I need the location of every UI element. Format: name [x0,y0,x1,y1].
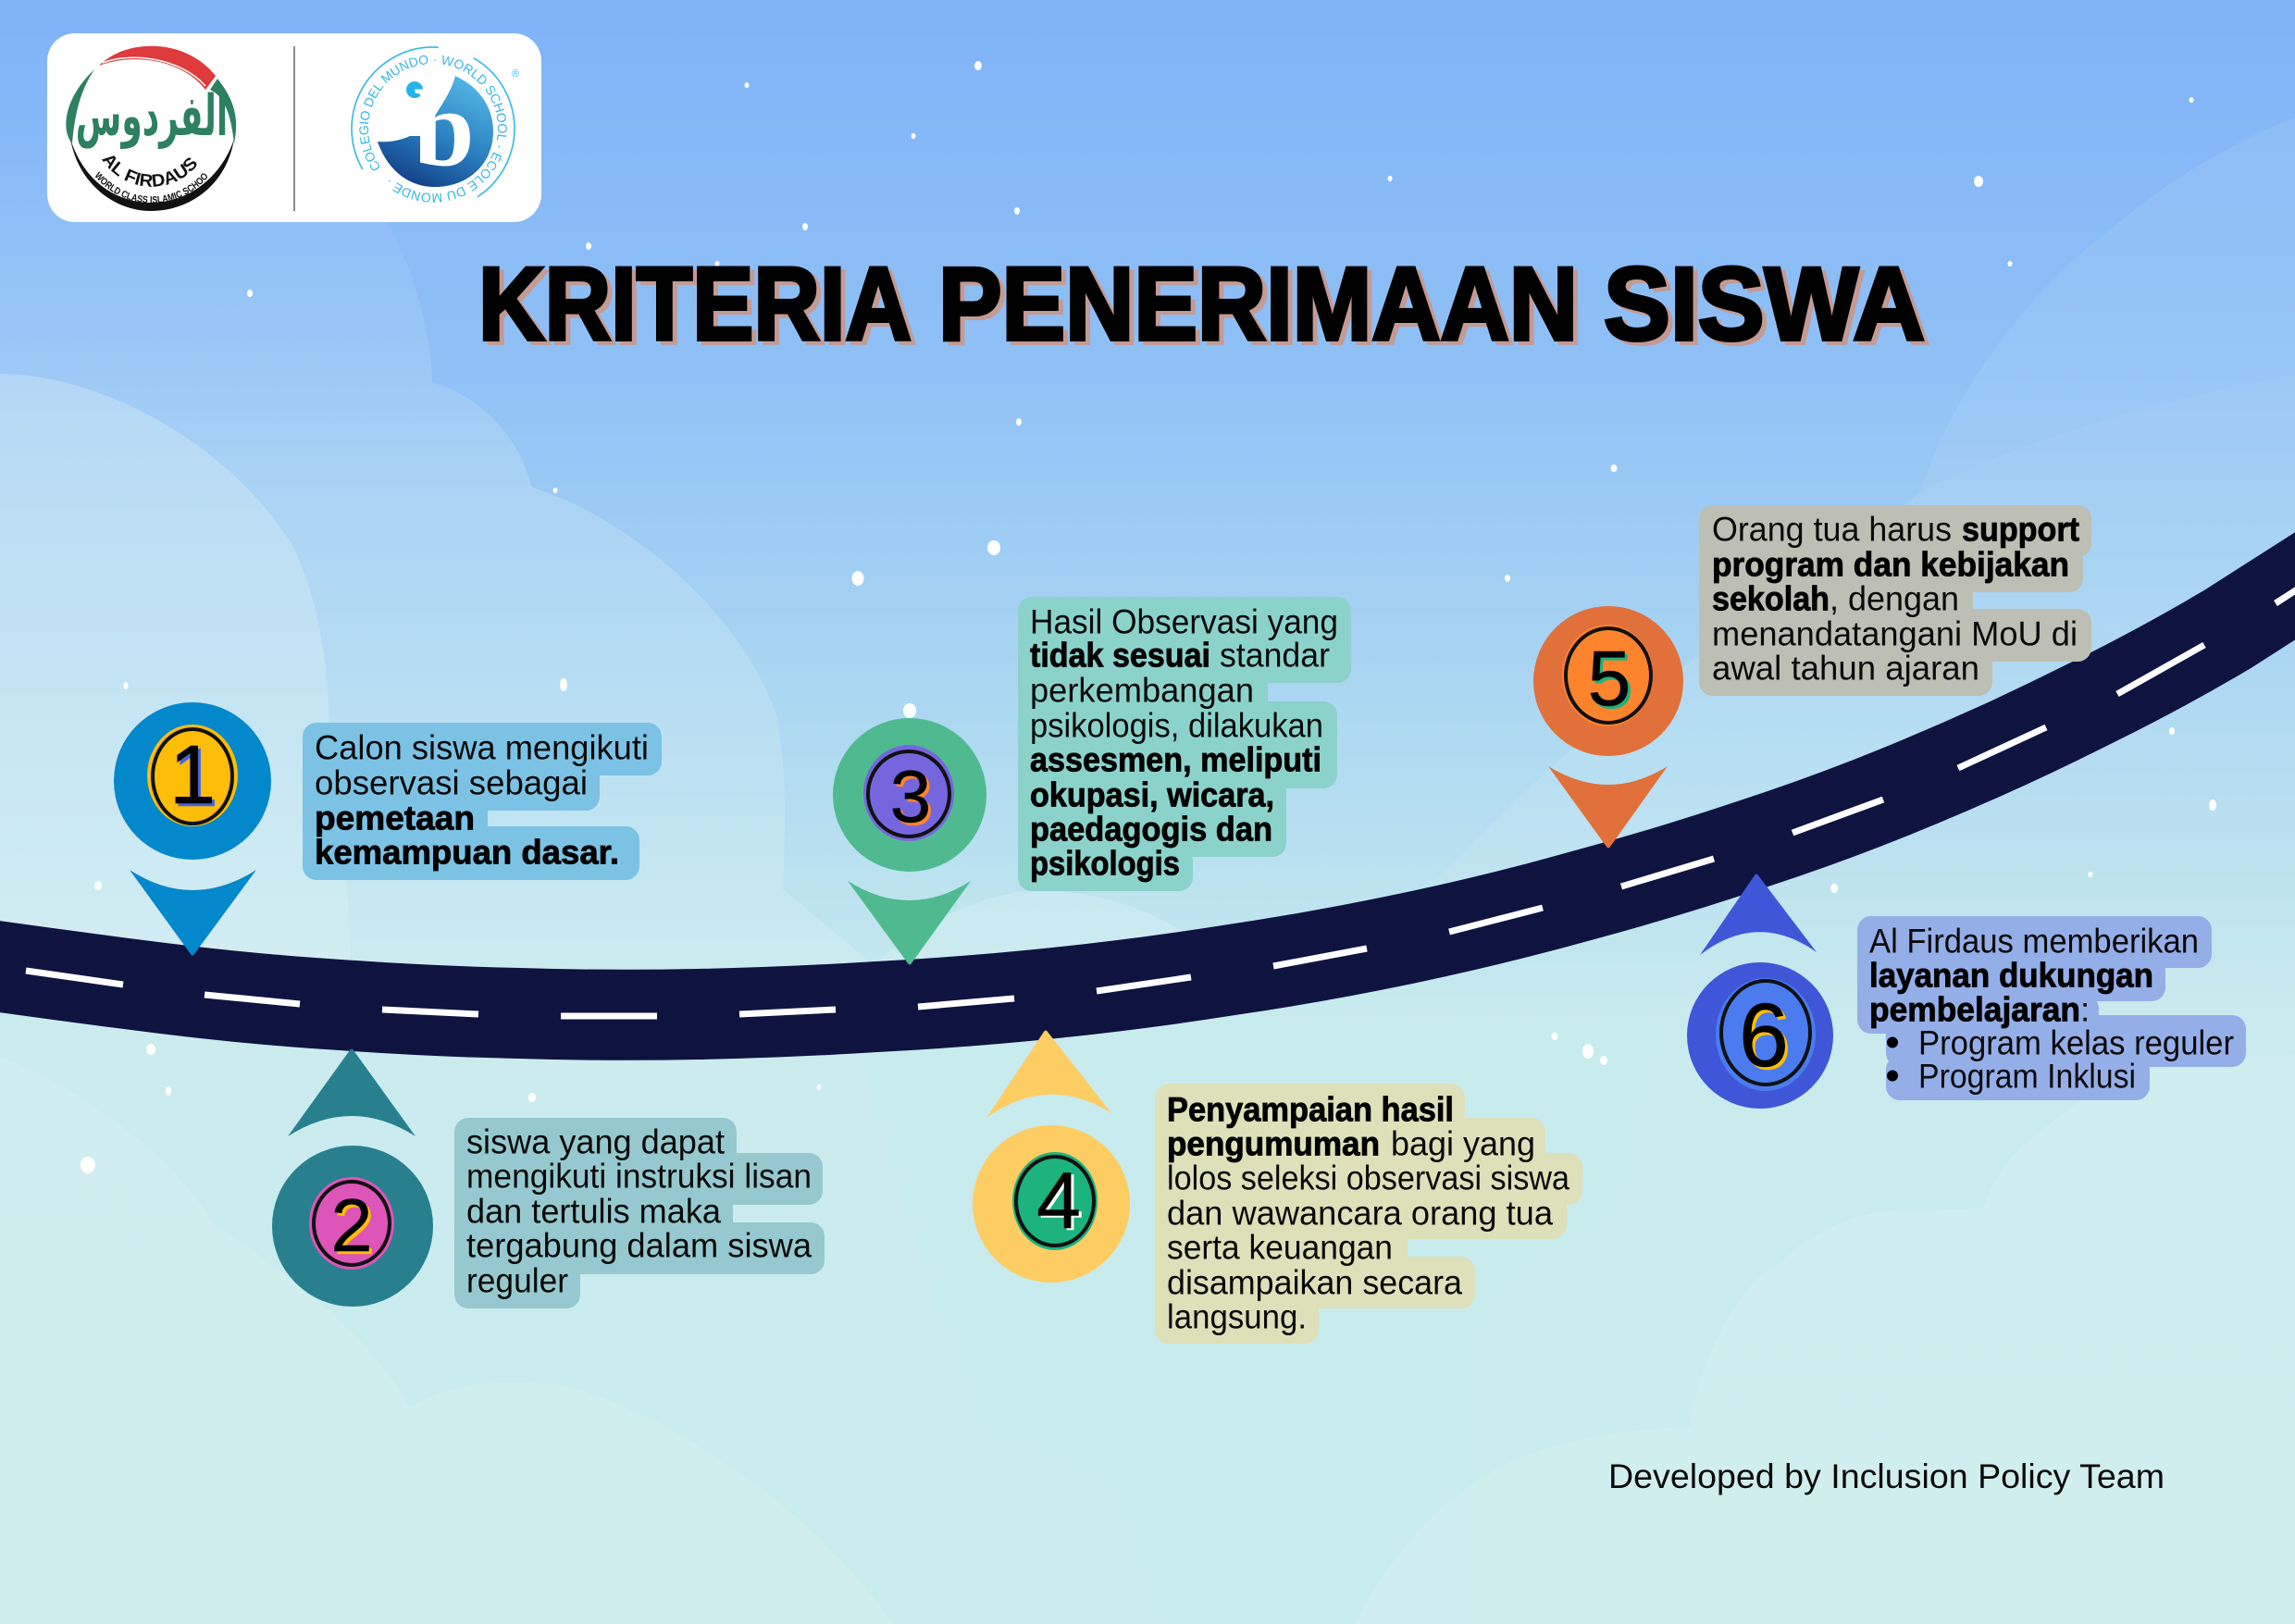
bubble 5 [1699,505,2091,696]
logo: Al Firdaus: الفردوس [76,83,228,150]
snow dots [81,61,2216,1173]
text 4: pengumuman [1167,1125,1380,1162]
text 2: reguler [466,1262,568,1299]
step 3 [833,597,1351,964]
text 5 [1712,511,2079,687]
pin 6: 6 [1739,985,1789,1085]
pin 5: 5 [1588,635,1631,722]
step 2 [272,1049,825,1308]
pin 2: 2 [333,1187,376,1271]
logo: IB World School: ® [512,68,519,80]
text 2: mengikuti instruksi lisan [466,1157,812,1196]
bubble 3 [1018,597,1351,891]
text 4: bagi yang [1391,1125,1535,1162]
text 5: menandatangani MoU di [1712,614,2078,653]
text 3: perkembangan [1030,672,1254,709]
pin 3: 3 [890,755,931,837]
title: PENERIMAAN [938,246,1578,362]
text 6: pembelajaran [1869,990,2080,1029]
title [478,246,1929,366]
title: SISWA [1608,250,1929,366]
text 1: Calon siswa mengikuti [315,729,649,766]
text 6: : [2080,990,2090,1029]
text 3: Hasil Observasi yang [1030,603,1338,640]
text 2: siswa yang dapat [466,1123,726,1160]
step 6 [1687,874,2246,1109]
pin 1 [114,702,271,955]
pin 6: 6 [1742,987,1792,1088]
pin 2: 2 [330,1184,373,1268]
pin 4: 4 [1036,1157,1081,1246]
logo: Al Firdaus [66,46,237,211]
text 2: tergabung dalam siswa [466,1227,812,1264]
text 5: support [1962,511,2079,548]
pin 4 [973,1031,1130,1283]
text 3: psikologis [1030,844,1180,883]
text 1 [315,729,649,872]
bubble 2 [454,1118,825,1308]
text 6: layanan dukungan [1869,957,2153,994]
text 6: Program kelas reguler [1918,1023,2234,1062]
text 3: psikologis, dilakukan [1030,707,1323,744]
pin 3: 3 [893,758,934,840]
bubble 4 [1155,1084,1582,1344]
pin 1: 1 [172,732,218,824]
text 5: awal tahun ajaran [1712,650,1979,687]
bubble 6 [1857,916,2246,1100]
text 4: Penyampaian hasil [1167,1090,1454,1129]
text 5: , dengan [1830,579,1959,618]
text 5: program dan kebijakan [1712,546,2069,583]
text 6 [1869,922,2234,1096]
text 3: tidak sesuai [1030,637,1210,674]
logo: IB World School: COLEGIO DEL MUNDO · WORLD SCHOOL · ÉCOLE DU MONDE · [359,56,507,203]
step 5 [1533,505,2091,848]
step 1 [114,702,662,955]
text 2 [466,1123,812,1299]
pin 5 [1533,606,1683,848]
title: KRITERIA [483,250,916,366]
text 4 [1167,1090,1569,1336]
logo: Al Firdaus: AL FIRDAUS [102,155,196,187]
footer credit: Developed by Inclusion Policy Team [1608,1457,2165,1495]
text 4: serta keuangan [1167,1229,1393,1266]
road [0,551,2295,1016]
step 4 [973,1031,1582,1344]
pin 6 [1687,874,1833,1109]
logo: IB World School: b [414,68,475,189]
text 3: standar [1220,637,1330,674]
text 1: pemetaan [315,800,475,837]
pin 1: 1 [169,729,216,822]
pin 4: 4 [1039,1159,1084,1247]
title: KRITERIA [478,246,912,362]
text 6: Al Firdaus memberikan [1869,922,2199,961]
text 3: assesmen, meliputi [1030,740,1321,779]
text 3 [1030,603,1338,883]
pin 2 [272,1049,433,1307]
text 6: Program Inklusi [1918,1057,2136,1096]
logo card [47,33,541,222]
text 3: okupasi, wicara, [1030,775,1274,814]
text 4: disampaikan secara [1167,1264,1462,1301]
text 5: sekolah [1712,579,1830,618]
text 1: observasi sebagai [315,764,588,801]
text 4: lolos seleksi observasi siswa [1167,1159,1569,1197]
pin 5: 5 [1591,638,1633,725]
text 4: langsung. [1167,1297,1307,1336]
text 2: dan tertulis maka [466,1192,721,1231]
title: PENERIMAAN [943,250,1582,366]
text 4: dan wawancara orang tua [1167,1194,1553,1233]
pin 3 [833,718,986,964]
text 5: Orang tua harus [1712,511,1952,548]
bubble 1 [303,723,662,880]
title: SISWA [1604,246,1925,362]
text 3: paedagogis dan [1030,811,1272,848]
text 1: kemampuan dasar. [315,833,619,872]
